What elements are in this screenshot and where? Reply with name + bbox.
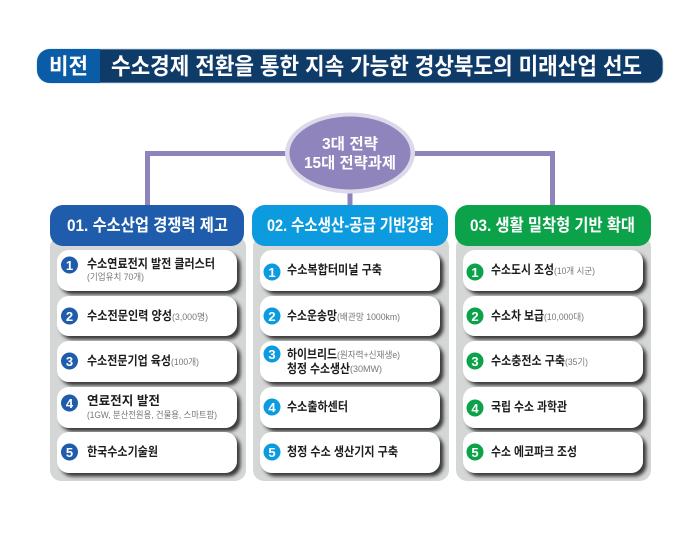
item 3: 3 <box>471 354 479 369</box>
item 4: 4 <box>268 400 276 415</box>
item 2: 수소차 보급 <box>491 309 544 323</box>
item 5: 5 <box>471 445 479 460</box>
item 5: 청정 수소 생산기지 구축 <box>287 444 398 459</box>
item 3: 3 <box>268 347 276 362</box>
item 3 <box>260 341 440 382</box>
banner label: 비전: 비전 <box>49 54 88 79</box>
item 4 <box>57 387 237 428</box>
item 1: 1 <box>471 265 479 280</box>
item 1: 수소복합터미널 구축 <box>287 262 382 277</box>
item 2 <box>463 296 643 336</box>
item 1: (기업유치 70개) <box>87 271 144 282</box>
item 3: 3 <box>66 354 73 369</box>
item 1 <box>463 250 643 291</box>
item 3: (원자력+신재생e) <box>337 349 400 360</box>
item 3: (35기) <box>565 357 588 367</box>
item 2: (배관망 1000km) <box>337 312 400 322</box>
item 1: 1 <box>268 265 276 280</box>
item 5: 5 <box>268 445 276 460</box>
strategy ellipse: 3대 전략 <box>322 135 378 153</box>
item 5 <box>57 432 237 473</box>
item 4: 4 <box>66 396 74 411</box>
panel: 02 production and supply <box>252 205 449 481</box>
heading 01: 01. 수소산업 경쟁력 제고 <box>67 216 228 235</box>
item 3: 수소전문기업 육성 <box>87 353 171 368</box>
heading 02 <box>252 205 448 246</box>
item 4 <box>260 387 440 428</box>
item 1: (10개 시군) <box>554 266 595 276</box>
item 5 <box>260 432 440 473</box>
item 5: 수소 에코파크 조성 <box>491 445 577 459</box>
item 4: (1GW, 분산전원용, 건물용, 스마트팜) <box>87 410 217 420</box>
strategy ellipse <box>285 112 415 194</box>
item 1: 1 <box>66 258 73 273</box>
item 2: 수소전문인력 양성 <box>87 309 172 323</box>
banner title: 수소경제 전환을 통한 지속 가능한 경상북도의 미래산업 선도 <box>111 53 642 79</box>
item 1 <box>260 250 440 291</box>
item 2 <box>57 296 237 336</box>
item 5: 5 <box>66 445 73 460</box>
item 5: 한국수소기술원 <box>87 444 158 459</box>
item 2 <box>260 296 440 336</box>
item 1: 수소도시 조성 <box>491 263 554 277</box>
item 4: 4 <box>471 401 479 416</box>
heading 03: 03. 생활 밀착형 기반 확대 <box>470 216 635 235</box>
heading 03 <box>455 205 651 246</box>
item 4: 수소출하센터 <box>287 400 348 414</box>
strategy ellipse: 15대 전략과제 <box>304 154 396 172</box>
heading 01 <box>50 205 244 246</box>
item 4: 국립 수소 과학관 <box>491 399 567 414</box>
item 4 <box>463 387 643 428</box>
item 2: (3,000명) <box>172 312 208 322</box>
panel: 03 everyday infrastructure <box>455 205 651 481</box>
item 1 <box>57 250 237 291</box>
item 2: 2 <box>471 309 479 324</box>
item 3: 하이브리드 <box>287 348 337 362</box>
item 2: 수소운송망 <box>287 309 337 323</box>
item 4: 연료전지 발전 <box>87 394 160 408</box>
item 2: (10,000대) <box>544 312 584 322</box>
panel: 01 competitiveness <box>50 205 246 481</box>
item 3: 청정 수소생산 <box>287 361 350 376</box>
item 1: 수소연료전지 발전 클러스터 <box>87 257 215 271</box>
banner label: 비전 <box>37 49 100 83</box>
item 2: 2 <box>66 309 73 324</box>
item 3 <box>463 341 643 382</box>
item 5 <box>463 432 643 473</box>
connector lines <box>148 154 552 206</box>
vision banner <box>37 49 663 83</box>
heading 02: 02. 수소생산-공급 기반강화 <box>267 216 433 235</box>
item 3: 수소충전소 구축 <box>491 354 565 368</box>
item 3: (30MW) <box>350 364 382 374</box>
item 3 <box>57 341 237 382</box>
item 2: 2 <box>268 309 276 324</box>
item 3: (100개) <box>171 357 199 367</box>
